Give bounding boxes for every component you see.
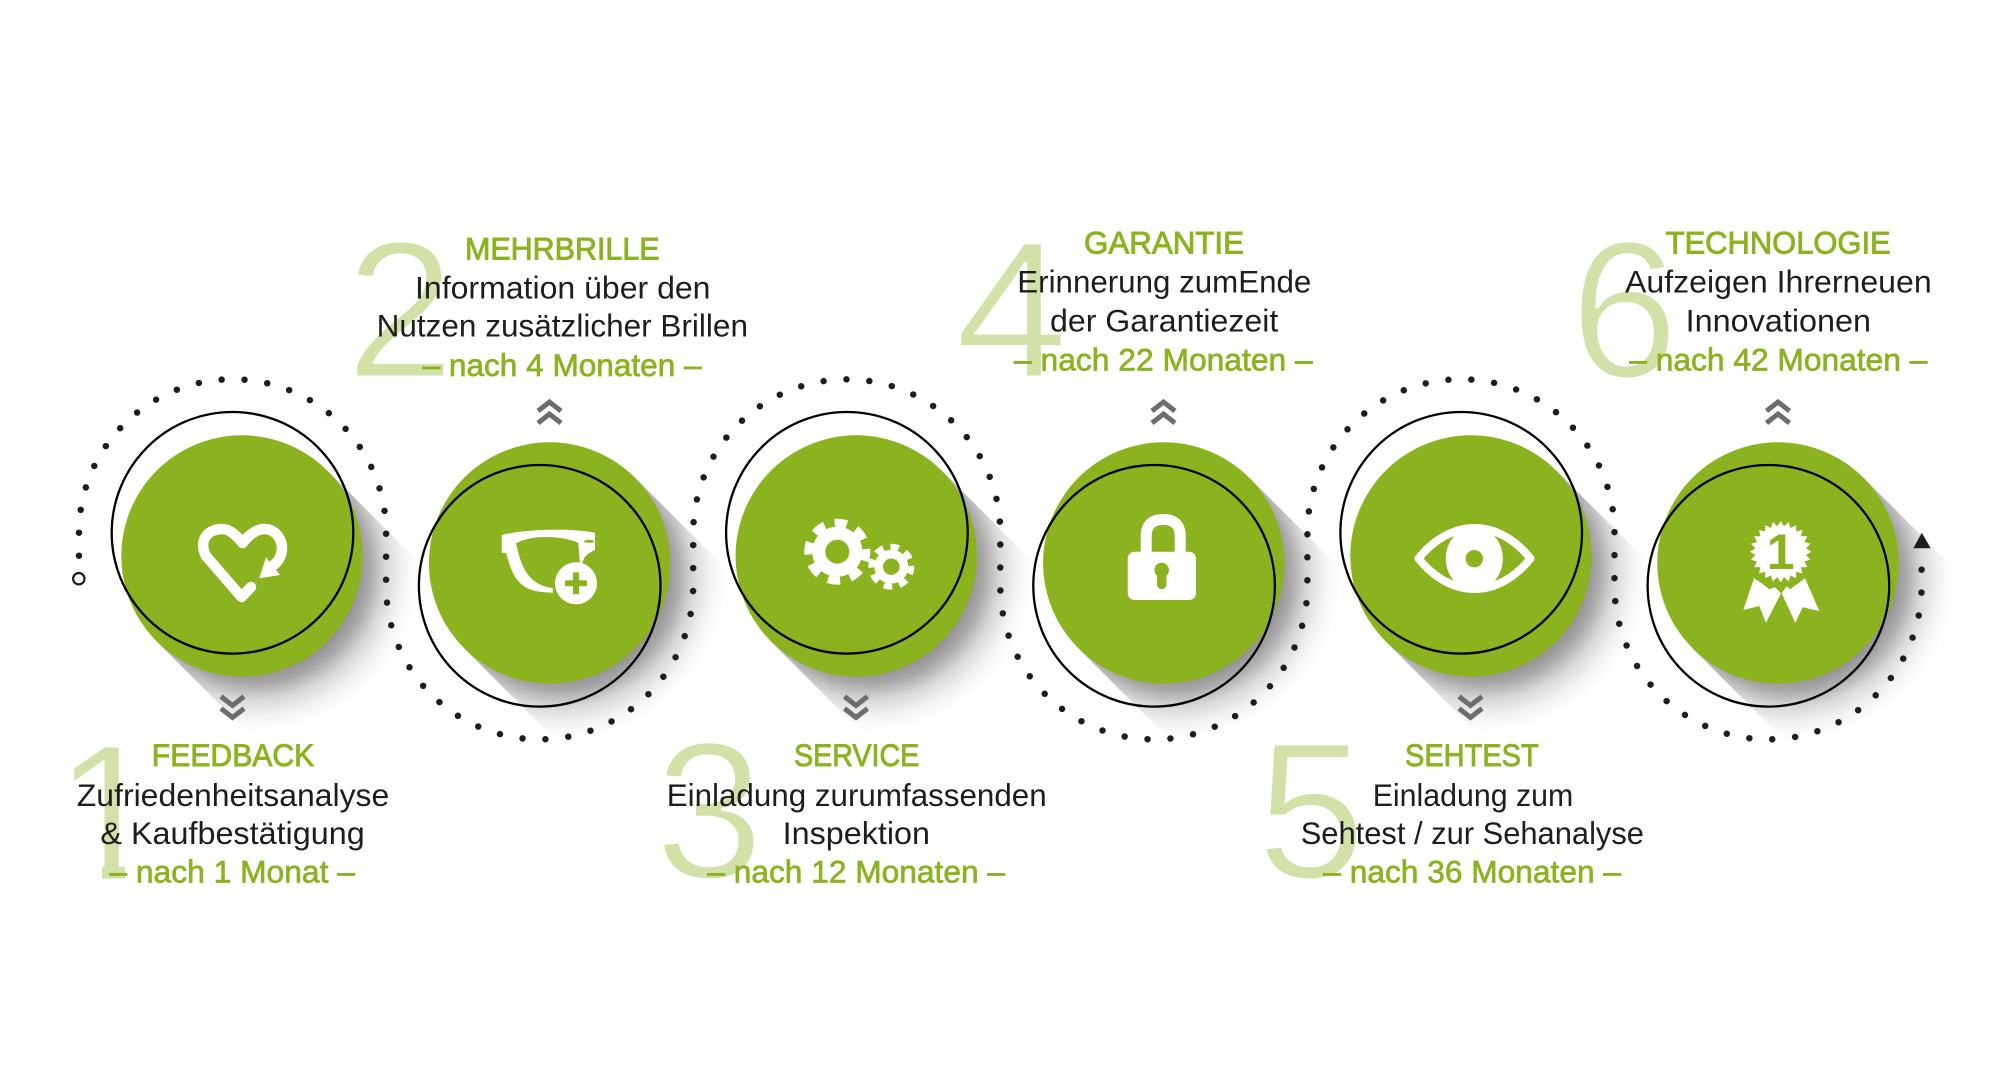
icon: award rosette: 1 [1767, 524, 1795, 580]
chevron down [1459, 696, 1482, 718]
big number 6: 6 [1570, 201, 1678, 419]
big number 4: 4 [955, 201, 1068, 419]
big number 1: 1 [54, 704, 162, 922]
text block: feedback [77, 737, 389, 890]
text block: garantie: der Garantiezeit [1050, 303, 1279, 339]
text block: technologie: Aufzeigen Ihrerneuen [1625, 264, 1932, 300]
text block: garantie: GARANTIE [1084, 224, 1244, 260]
green disc 2 [429, 442, 670, 684]
end marker: arrow triangle [1913, 533, 1931, 548]
chevron down [221, 696, 244, 718]
step 3: service [655, 412, 1047, 920]
step 4: garantie [955, 201, 1313, 707]
text block: feedback: FEEDBACK [152, 737, 314, 773]
outline ring 5 [1340, 412, 1582, 654]
text block: mehrbrille: Information über den [415, 269, 710, 305]
text block: feedback: & Kaufbestätigung [100, 815, 365, 851]
text block: mehrbrille: Nutzen zusätzlicher Brillen [377, 308, 748, 344]
text block: sehtest: – nach 36 Monaten – [1323, 854, 1621, 890]
icon: award rosette [1743, 521, 1819, 623]
big number 2: 2 [346, 201, 454, 419]
chevron up [1152, 402, 1175, 423]
dotted wave path [79, 379, 1922, 739]
icon: glasses with plus [502, 530, 597, 604]
icon: gears [808, 523, 911, 587]
chevron down [844, 696, 868, 718]
text block: garantie: Erinnerung zumEnde [1017, 264, 1311, 300]
big number 5: 5 [1257, 702, 1365, 920]
text block: sehtest [1301, 737, 1644, 890]
text block: sehtest: Sehtest / zur Sehanalyse [1301, 815, 1644, 851]
outline ring 4 [1033, 465, 1275, 707]
green disc 4 [1043, 442, 1285, 684]
step 5: sehtest [1257, 412, 1644, 920]
step 1: feedback [74, 410, 388, 884]
big number 3: 3 [655, 702, 763, 920]
start marker: open circle [73, 573, 85, 584]
outline ring 3 [726, 412, 968, 654]
green disc 3 [736, 435, 977, 677]
icon: heart with arrow [203, 529, 282, 597]
outline ring 2 [419, 465, 660, 707]
text block: mehrbrille: – nach 4 Monaten – [423, 347, 702, 383]
icon: eye [1418, 527, 1530, 591]
green disc 6 [1657, 442, 1899, 684]
text block: service [667, 737, 1047, 890]
text block: service: Einladung zurumfassenden [667, 777, 1047, 813]
text block: mehrbrille: MEHRBRILLE [465, 230, 660, 266]
chevron up [538, 402, 561, 423]
outline ring 1 [112, 412, 353, 654]
text block: technologie: TECHNOLOGIE [1666, 224, 1891, 260]
text block: sehtest: Einladung zum [1373, 777, 1573, 813]
text block: technologie: – nach 42 Monaten – [1629, 342, 1928, 378]
text block: technologie: Innovationen [1686, 303, 1871, 339]
step 6: technologie [1570, 201, 1932, 707]
chevron up [1766, 402, 1790, 423]
text block: service: – nach 12 Monaten – [707, 854, 1005, 890]
text block: technologie [1625, 224, 1932, 378]
step 2: mehrbrille [346, 201, 748, 707]
outline ring 6 [1648, 465, 1889, 707]
icon: padlock [1128, 520, 1196, 600]
text block: garantie: – nach 22 Monaten – [1014, 342, 1313, 378]
text block: service: SERVICE [794, 737, 919, 773]
green disc 5 [1350, 435, 1592, 677]
text block: garantie [1014, 224, 1313, 378]
text block: sehtest: SEHTEST [1405, 737, 1539, 773]
text block: feedback: – nach 1 Monat – [109, 854, 355, 890]
text block: mehrbrille [377, 230, 748, 383]
long shadows behind the discs [157, 471, 2000, 848]
green disc 1 [121, 435, 363, 677]
text block: service: Inspektion [783, 815, 930, 851]
text block: feedback: Zufriedenheitsanalyse [77, 777, 389, 813]
